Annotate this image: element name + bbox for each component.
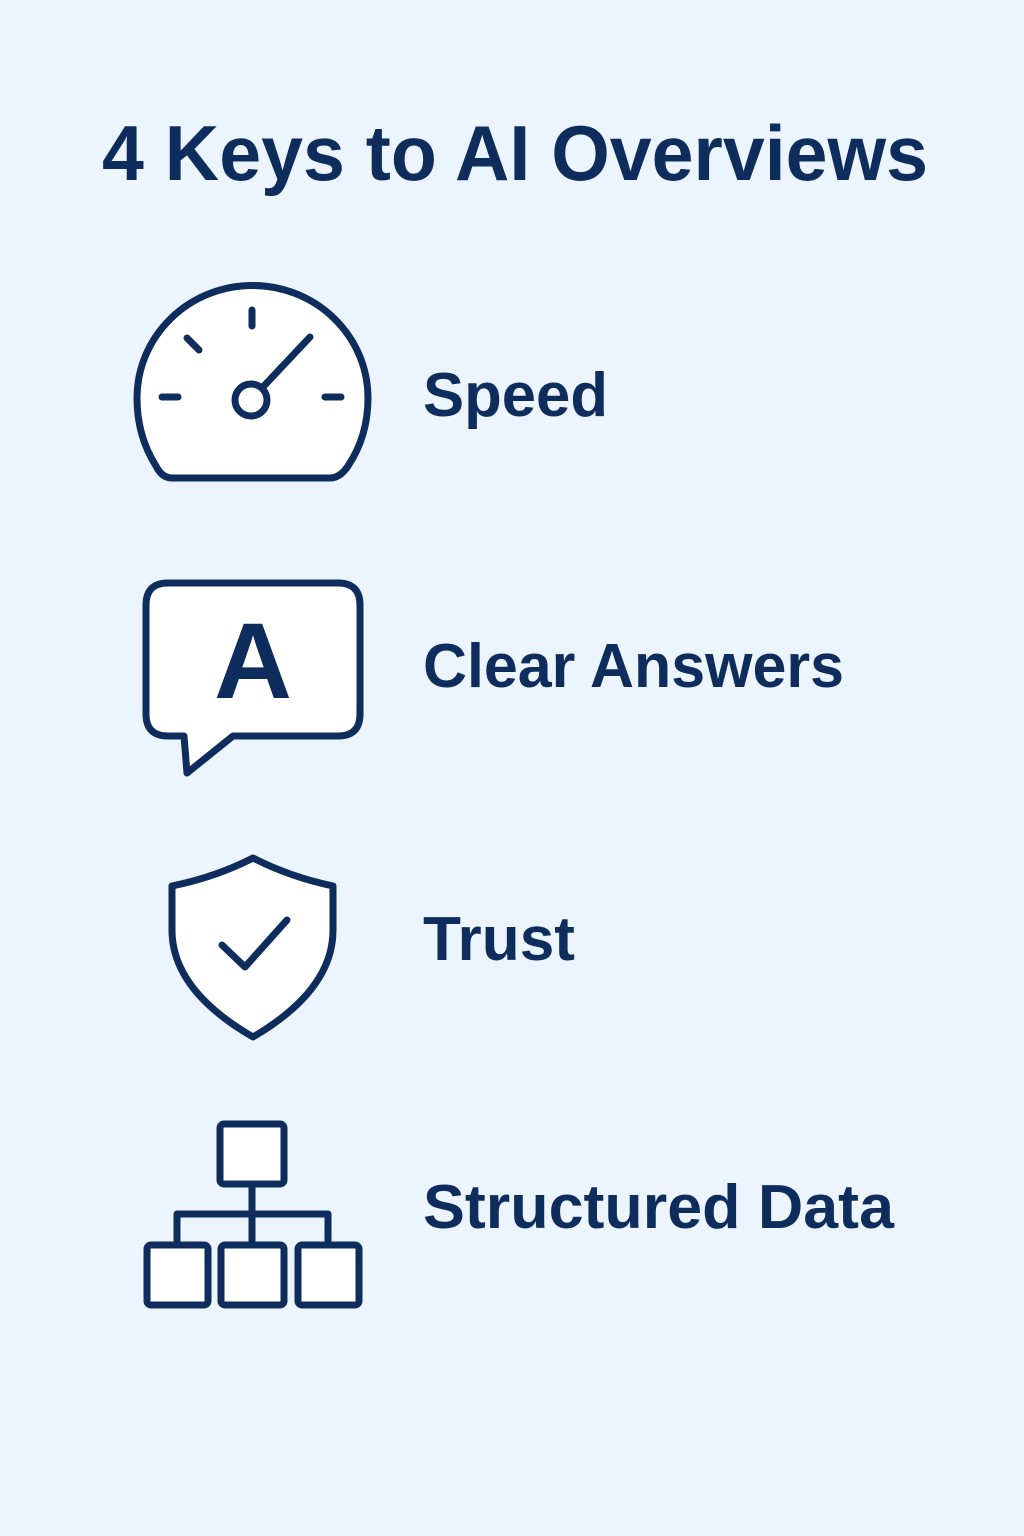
label: speed: Speed	[423, 361, 608, 430]
label: structured data: Structured Data	[423, 1173, 895, 1242]
label: clear answers: Clear Answers	[423, 632, 844, 701]
icon: speedometer	[137, 286, 368, 478]
icon: hierarchy	[147, 1124, 359, 1305]
icon: speech bubble with A	[146, 583, 360, 773]
icon: speech bubble with A: A	[214, 600, 292, 721]
icon: shield with check	[172, 858, 333, 1037]
label: trust: Trust	[423, 905, 575, 974]
title: 4 Keys to AI Overviews	[102, 109, 928, 197]
